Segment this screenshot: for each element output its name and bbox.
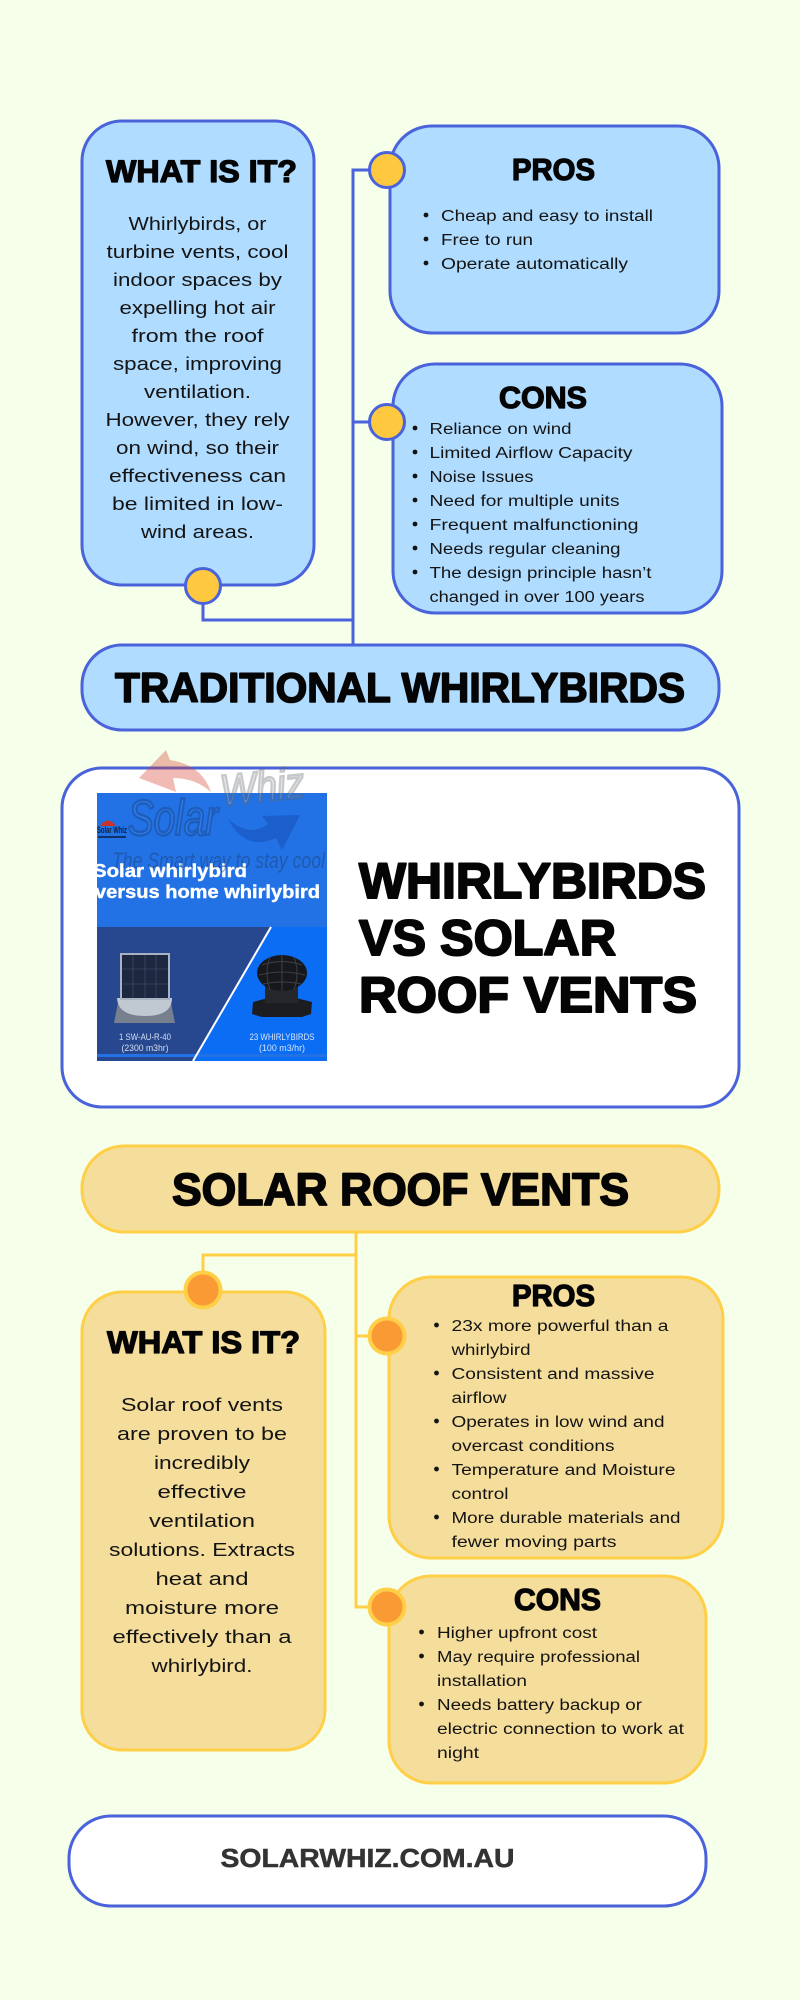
text block: solar vent description: solutions. Extracts	[109, 1540, 295, 1560]
image title	[93, 860, 320, 902]
text block: solar vent description: moisture more	[125, 1598, 279, 1618]
connector lines: traditional whirlybirds	[203, 170, 387, 644]
icon: red arrow	[139, 750, 211, 792]
icon: connector node cons	[370, 1590, 404, 1624]
text block: solar vent description: whirlybird.	[150, 1656, 252, 1676]
panel: what is it (whirlybirds)	[82, 121, 314, 585]
text block: whirlybird description: wind areas.	[140, 522, 254, 542]
heading: cons: CONS	[514, 1582, 601, 1617]
list: whirlybird cons: Noise Issues	[430, 469, 534, 486]
list: solar pros: airflow	[452, 1390, 507, 1407]
list: solar cons: Higher upfront cost	[437, 1625, 598, 1642]
list: solar pros: Operates in low wind and	[452, 1414, 664, 1431]
icon: connector node what is it	[186, 1272, 220, 1308]
list: whirlybird cons: The design principle hasn’t	[430, 565, 652, 582]
text block: whirlybird description: on wind, so their	[116, 438, 279, 458]
list: whirlybird cons: Limited Airflow Capacity	[430, 445, 633, 462]
list: whirlybird pros: Free to run	[441, 232, 533, 249]
list: whirlybird cons: Need for multiple units	[430, 493, 620, 510]
icon: blue arrow	[228, 815, 300, 850]
image title: versus home whirlybird	[95, 881, 320, 902]
text block: whirlybird description: effectiveness can	[109, 466, 286, 486]
heading: what is it: WHAT IS IT?	[107, 1324, 300, 1360]
logo word whiz: Whiz	[218, 758, 307, 816]
list: whirlybird cons: Needs regular cleaning	[430, 541, 620, 558]
heading: cons: CONS	[499, 380, 587, 415]
list: solar pros: Consistent and massive	[452, 1366, 654, 1383]
footer: website	[69, 1816, 706, 1906]
list: solar cons: Needs battery backup or	[437, 1697, 642, 1714]
text block: whirlybird description: from the roof	[132, 326, 265, 346]
panel: cons (whirlybirds)	[393, 364, 722, 613]
banner: traditional whirlybirds	[82, 645, 719, 730]
heading: pros: PROS	[512, 1278, 595, 1313]
label: whirlybirds: 23 WHIRLYBIRDS	[250, 1032, 314, 1043]
list: whirlybird cons	[413, 421, 652, 606]
text block: whirlybird description: Whirlybirds, or	[128, 214, 267, 234]
text block: solar vent description: are proven to be	[117, 1424, 287, 1444]
list: solar cons	[419, 1625, 685, 1762]
list: solar pros: whirlybird	[450, 1342, 530, 1359]
list: whirlybird pros	[424, 208, 653, 273]
text block: solar vent description: heat and	[156, 1569, 248, 1589]
icon: turbine whirlybird	[252, 955, 312, 1017]
text block: whirlybird description: expelling hot air	[120, 298, 276, 318]
text block: whirlybird description: be limited in low-	[112, 494, 283, 514]
text block: whirlybird description: space, improving	[113, 354, 282, 374]
list: solar pros: fewer moving parts	[452, 1534, 617, 1551]
text block: whirlybird description: ventilation.	[144, 382, 251, 402]
banner title: TRADITIONAL WHIRLYBIRDS	[115, 664, 685, 711]
small logo: Solar Whiz	[97, 825, 127, 835]
icon: connector node what is it	[186, 568, 220, 604]
small logo	[97, 820, 127, 838]
heading: whirlybirds vs solar roof vents: ROOF VENTS	[359, 967, 697, 1023]
label: solar vent	[120, 1034, 171, 1053]
label: whirlybirds: (100 m3/hr)	[259, 1043, 305, 1054]
list: whirlybird cons: Reliance on wind	[430, 421, 572, 438]
logo tagline: The Smart way to stay cool	[112, 848, 326, 873]
icon: connector node cons	[370, 404, 404, 440]
text block: solar vent description: Solar roof vents	[121, 1395, 283, 1415]
heading: whirlybirds vs solar roof vents: WHIRLYBIRDS	[359, 853, 706, 909]
panel: what is it (solar)	[82, 1292, 325, 1750]
panel: comparison	[62, 768, 739, 1107]
banner: solar roof vents	[82, 1146, 719, 1232]
website text: SOLARWHIZ.COM.AU	[220, 1843, 514, 1873]
text block: whirlybird description: However, they rely	[106, 410, 290, 430]
text block: solar vent description: incredibly	[154, 1453, 250, 1473]
list: whirlybird cons: changed in over 100 years	[430, 589, 645, 606]
logo watermark	[112, 750, 326, 873]
label: solar vent: 1 SW-AU-R-40	[119, 1032, 171, 1043]
banner title: SOLAR ROOF VENTS	[172, 1164, 629, 1215]
text block: solar vent description: effectively than a	[112, 1627, 293, 1647]
icon: connector node pros	[370, 152, 404, 188]
text block: solar vent description	[109, 1395, 295, 1676]
list: solar cons: installation	[437, 1673, 527, 1690]
list: solar pros: Temperature and Moisture	[452, 1462, 676, 1479]
list: whirlybird pros: Cheap and easy to install	[441, 208, 653, 225]
list: solar pros: control	[452, 1486, 508, 1503]
panel: pros (whirlybirds)	[390, 126, 719, 333]
text block: solar vent description: effective	[158, 1482, 246, 1502]
text block: whirlybird description	[106, 214, 290, 542]
text block: solar vent description: ventilation	[149, 1511, 255, 1531]
connector lines: solar roof vents	[203, 1232, 387, 1607]
logo word solar: Solar	[128, 790, 220, 846]
label: solar vent: (2300 m3hr)	[122, 1043, 168, 1054]
list: solar cons: electric connection to work at	[437, 1721, 685, 1738]
list: solar pros: More durable materials and	[452, 1510, 680, 1527]
list: solar cons: night	[437, 1745, 480, 1762]
heading: pros: PROS	[512, 152, 595, 187]
panel: cons (solar)	[389, 1576, 706, 1783]
icon: connector node pros	[370, 1318, 404, 1354]
list: whirlybird pros: Operate automatically	[441, 256, 628, 273]
list: solar pros: 23x more powerful than a	[452, 1318, 669, 1335]
panel: pros (solar)	[389, 1277, 723, 1558]
icon: solar roof vent	[114, 953, 175, 1023]
list: solar cons: May require professional	[437, 1649, 640, 1666]
image title: Solar whirlybird	[93, 860, 247, 881]
heading: what is it: WHAT IS IT?	[106, 153, 297, 189]
list: solar pros	[434, 1318, 680, 1551]
label: whirlybirds	[250, 1034, 314, 1053]
heading: whirlybirds vs solar roof vents	[359, 853, 706, 1023]
text block: whirlybird description: indoor spaces by	[113, 270, 282, 290]
heading: whirlybirds vs solar roof vents: VS SOLAR	[359, 910, 616, 966]
text block: whirlybird description: turbine vents, cool	[106, 242, 288, 262]
image: solar whirlybird versus home whirlybird	[93, 793, 327, 1061]
list: whirlybird cons: Frequent malfunctioning	[430, 517, 638, 534]
list: solar pros: overcast conditions	[452, 1438, 615, 1455]
